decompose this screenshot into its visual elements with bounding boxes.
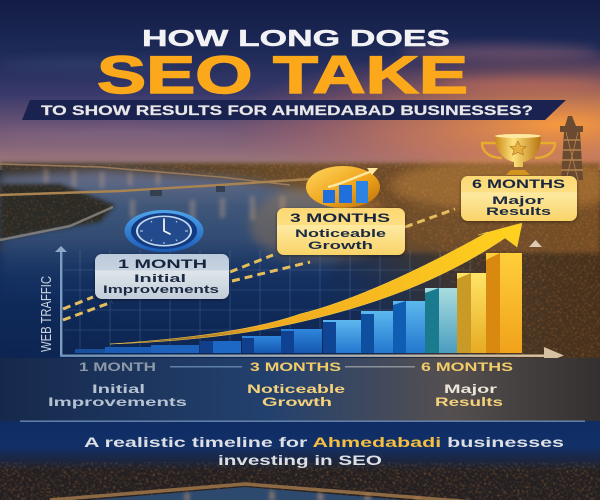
- description: 3 months: Noticeable: [247, 382, 346, 396]
- callout box: Noticeable: [295, 228, 386, 240]
- callout box: [95, 254, 229, 299]
- icon: trophy: [482, 134, 555, 175]
- callout box: 3 MONTHS: [290, 213, 391, 225]
- description: 1 month: Initial: [92, 382, 145, 396]
- chart: [38, 209, 564, 363]
- timeline months row: [79, 362, 514, 374]
- timeline months row: 3 MONTHS: [250, 362, 342, 374]
- callout box: Initial: [134, 273, 186, 285]
- title line: seo take: SEO TAKE: [97, 46, 468, 105]
- description: 6 months: [435, 382, 503, 409]
- tagline text: A realistic timeline for Ahmedabadi businesses: [84, 435, 564, 450]
- milestone: 1 month: [95, 210, 229, 299]
- bars: [75, 253, 522, 353]
- description: 1 month: [48, 382, 188, 409]
- tagline text: investing in SEO: [218, 453, 382, 468]
- bottom tagline panel: [0, 420, 600, 471]
- callout box: Major: [492, 195, 545, 207]
- description: 3 months: [247, 382, 346, 409]
- timeline months row: 1 MONTH: [79, 362, 156, 374]
- growth arrow: [110, 223, 522, 344]
- description: 6 months: Major: [444, 382, 498, 396]
- subtitle ribbon: [22, 100, 566, 120]
- callout box: Improvements: [103, 284, 219, 296]
- description: 1 month: Improvements: [48, 395, 188, 409]
- title: [22, 25, 566, 120]
- timeline labels panel: [0, 358, 600, 421]
- background: dusk sky and city: [0, 8, 600, 358]
- tower landmark: [560, 116, 583, 180]
- title line: how long does: HOW LONG DOES: [142, 25, 450, 51]
- tagline text: [84, 435, 564, 468]
- callout box: 6 MONTHS: [472, 179, 566, 191]
- x axis: [60, 347, 564, 363]
- callout box: [277, 208, 405, 255]
- milestone: 3 months: [277, 166, 405, 255]
- timeline months row: 6 MONTHS: [421, 362, 514, 374]
- y axis: [55, 246, 67, 356]
- bottom cityscape and river: [0, 450, 600, 500]
- callout box: [461, 176, 577, 221]
- callout box: Growth: [308, 240, 373, 252]
- small marker triangle: [529, 240, 542, 247]
- milestone: 6 months: [461, 134, 577, 221]
- subtitle ribbon: TO SHOW RESULTS FOR AHMEDABAD BUSINESSES?: [41, 103, 533, 118]
- callout box: 1 MONTH: [118, 259, 207, 271]
- icon: growth chart badge: [306, 166, 380, 208]
- description: 3 months: Growth: [262, 395, 332, 409]
- dashed milestone paths: [63, 209, 455, 320]
- description: 6 months: Results: [435, 395, 503, 409]
- y axis label: WEB TRAFFIC: [38, 276, 55, 352]
- callout box: Results: [486, 206, 551, 218]
- grid lines: [64, 250, 470, 353]
- icon: clock: [124, 210, 204, 252]
